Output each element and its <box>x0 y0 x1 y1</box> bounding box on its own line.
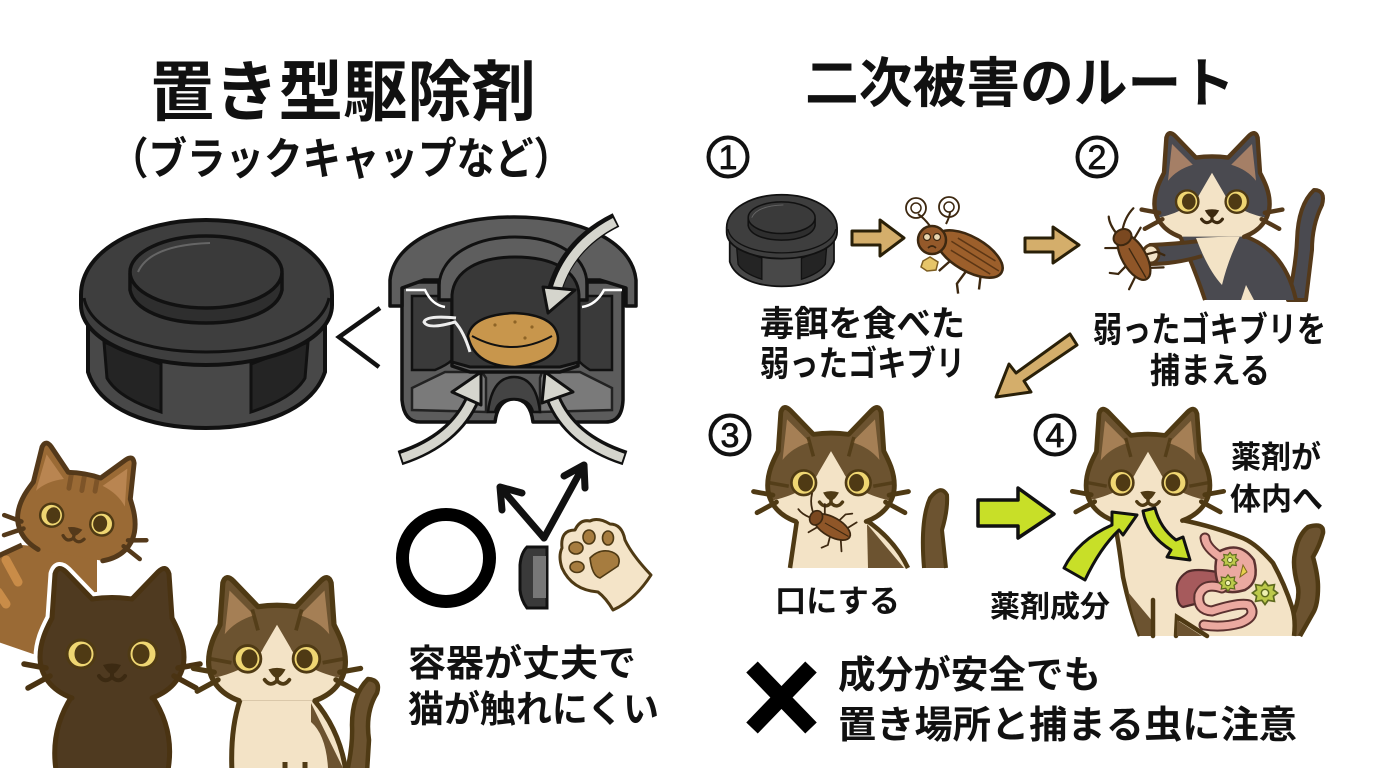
text: container is sturdy: 猫が触れにくい <box>408 689 659 730</box>
air arrow bottom left <box>400 372 481 458</box>
step 1 number <box>708 138 748 177</box>
step 2: gray cat catching cockroach <box>1085 133 1323 300</box>
step 1: poisoned cockroach <box>906 197 1010 307</box>
step 3 number <box>710 416 750 455</box>
green arrow into mouth <box>1064 512 1137 580</box>
brown leg patch <box>1128 592 1153 636</box>
title: 置き型駆除剤: 置き型駆除剤 <box>150 55 536 129</box>
tan arrow 1 <box>852 220 904 256</box>
spoon shaped hook <box>424 317 470 352</box>
cap <box>390 217 636 372</box>
green arrow into stomach <box>1143 508 1190 560</box>
subtitle: ブラックキャップなど: （ブラックキャップなど） <box>110 135 572 184</box>
step 4: cat with digestive system <box>1064 409 1323 636</box>
step 2 caption <box>1093 310 1326 391</box>
step 4 number <box>1036 416 1074 455</box>
air arrow bottom right <box>542 372 625 458</box>
dark arch <box>488 377 540 412</box>
step 1 caption: 毒餌を食べた <box>760 305 965 344</box>
body of cross-section <box>402 282 623 422</box>
circle symbol <box>402 514 490 602</box>
text: container is sturdy <box>408 643 659 730</box>
tan diagonal arrow <box>996 334 1077 397</box>
label: medicine enters body <box>1230 440 1323 517</box>
step 3 caption: 口にする <box>775 584 900 619</box>
step 3 number: 3 <box>721 417 739 455</box>
label: medicine enters body: 薬剤が <box>1231 440 1321 475</box>
tail <box>1292 525 1323 636</box>
step 2 caption: 弱ったゴキブリを <box>1093 310 1326 350</box>
warning text <box>838 655 1297 747</box>
warning text: 置き場所と捕まる虫に注意 <box>838 705 1297 747</box>
black arrows deflecting <box>500 465 585 538</box>
digestive organs <box>1177 538 1278 626</box>
illustration: container cross-section <box>390 217 636 458</box>
label: medicine ingredient: 薬剤成分 <box>990 591 1110 624</box>
step 2 number <box>1078 138 1116 177</box>
warning text: 成分が安全でも <box>838 655 1101 697</box>
illustration: black bait container <box>81 220 332 428</box>
air arrow top <box>543 220 616 313</box>
icon: cross mark <box>752 667 811 728</box>
tan arrow 2 <box>1025 227 1079 263</box>
step 3: cat with cockroach in mouth <box>754 407 947 568</box>
step 1 caption: 弱ったゴキブリ <box>760 344 965 384</box>
label: medicine enters body: 体内へ <box>1230 482 1323 517</box>
text: container is sturdy: 容器が丈夫で <box>408 643 636 684</box>
step 2 number: 2 <box>1088 139 1106 177</box>
white seals <box>406 290 622 307</box>
icon: cat paw <box>560 520 651 610</box>
illustration: dark brown cat <box>24 568 200 768</box>
green arrow between steps 3 and 4 <box>978 488 1054 538</box>
poison bait <box>468 313 558 367</box>
step 2 caption: 捕まえる <box>1150 352 1270 391</box>
step 1 number: 1 <box>719 139 737 177</box>
inner chamber <box>452 257 579 367</box>
illustration: tabby cat <box>0 438 160 655</box>
container fragment <box>520 547 547 608</box>
body <box>1114 520 1295 636</box>
illustration: calico cat <box>193 578 378 768</box>
less-than symbol between container views <box>339 308 380 367</box>
title: 二次被害のルート: 二次被害のルート <box>805 54 1235 114</box>
step 1: small bait container <box>727 195 837 286</box>
step 4 number: 4 <box>1046 417 1064 455</box>
step 1 caption <box>760 305 965 384</box>
